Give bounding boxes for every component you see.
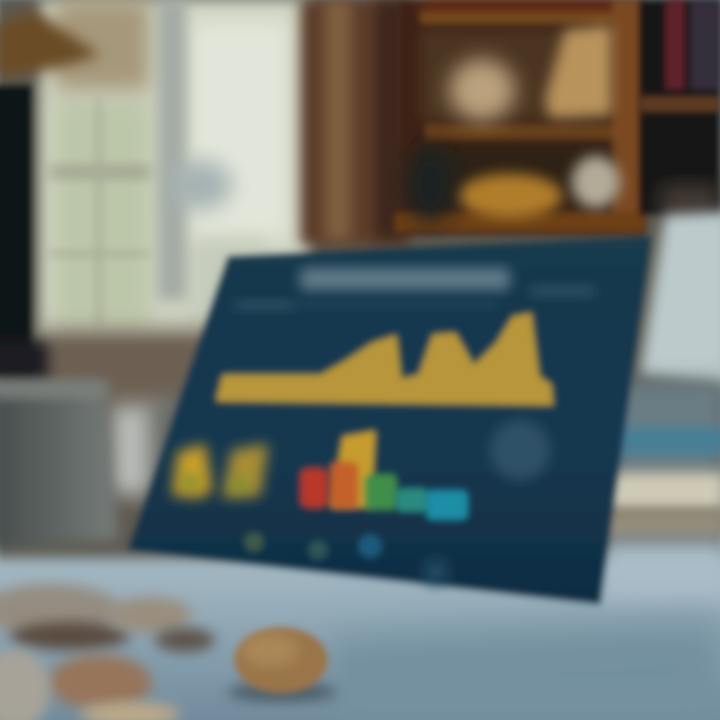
bottom icons: [244, 532, 449, 585]
bookshelf: [395, 0, 645, 235]
dashboard board: [128, 236, 652, 604]
right dark shelf with books: [640, 0, 720, 220]
right small widget: [490, 420, 550, 480]
wood panel: [300, 0, 410, 245]
yellow area chart: [216, 312, 554, 406]
dark column and lamp: [0, 10, 100, 380]
table: [0, 540, 720, 720]
colorful bars: [300, 430, 468, 520]
bread bun on table: [227, 627, 337, 702]
board panel: [128, 236, 652, 604]
right screen and objects: [595, 212, 720, 535]
left mini bars: [172, 444, 268, 498]
flower pot: [0, 380, 118, 548]
board header: [235, 268, 595, 310]
stones lower left: [0, 584, 215, 720]
